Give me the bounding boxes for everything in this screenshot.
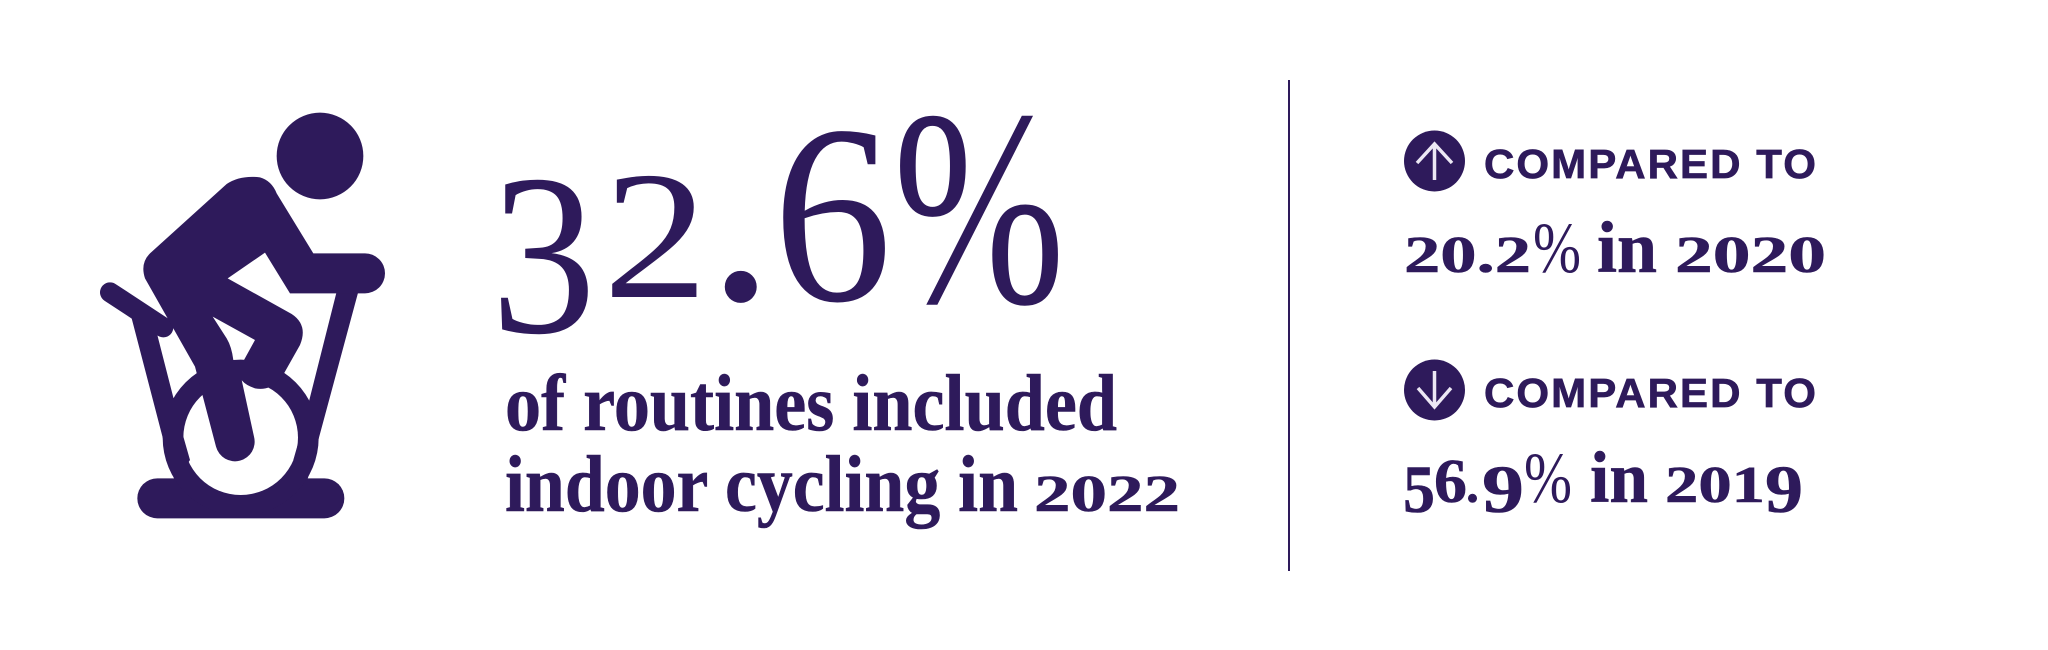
icon: person on exercise bike — [110, 113, 385, 518]
headline stat: 32.6%: 2 — [603, 134, 708, 337]
headline stat: 32.6%: 6 — [773, 74, 892, 356]
label: compared to: COMPARED TO — [1484, 370, 1818, 416]
divider — [1288, 80, 1290, 571]
value: 56.9% in 2019: % — [1524, 438, 1572, 518]
value: 20.2% in 2020: in — [1597, 207, 1657, 288]
headline stat: 32.6%: 3 — [491, 127, 596, 382]
icon: up arrow — [1404, 130, 1465, 192]
description text: 2022 — [1034, 466, 1180, 523]
headline stat: 32.6%: % — [893, 52, 1065, 363]
description text — [505, 360, 1180, 529]
description text: indoor cycling in — [505, 441, 1018, 529]
value: 56.9% in 2019: in — [1590, 437, 1648, 518]
value: 56.9% in 2019: 5 — [1403, 451, 1435, 527]
value: 56.9% in 2019: . — [1466, 457, 1479, 514]
value: 20.2% in 2020: 20.2 — [1404, 227, 1531, 284]
value: 20.2% in 2020: 2020 — [1675, 227, 1826, 284]
description text: of routines included — [505, 360, 1117, 448]
value: 56.9% in 2019: 6 — [1434, 448, 1467, 516]
headline stat: 32.6%: . — [707, 59, 774, 358]
icon: down arrow — [1404, 360, 1465, 420]
label: compared to: COMPARED TO — [1484, 141, 1818, 187]
value: 56.9% in 2019: 9 — [1482, 451, 1524, 527]
value: 56.9% in 2019: 9 — [1765, 451, 1803, 527]
comparison: 2020 — [1404, 130, 1826, 288]
comparison: 2019 — [1403, 360, 1818, 527]
value: 56.9% in 2019: 201 — [1665, 457, 1765, 514]
value: 20.2% in 2020: % — [1533, 208, 1581, 288]
